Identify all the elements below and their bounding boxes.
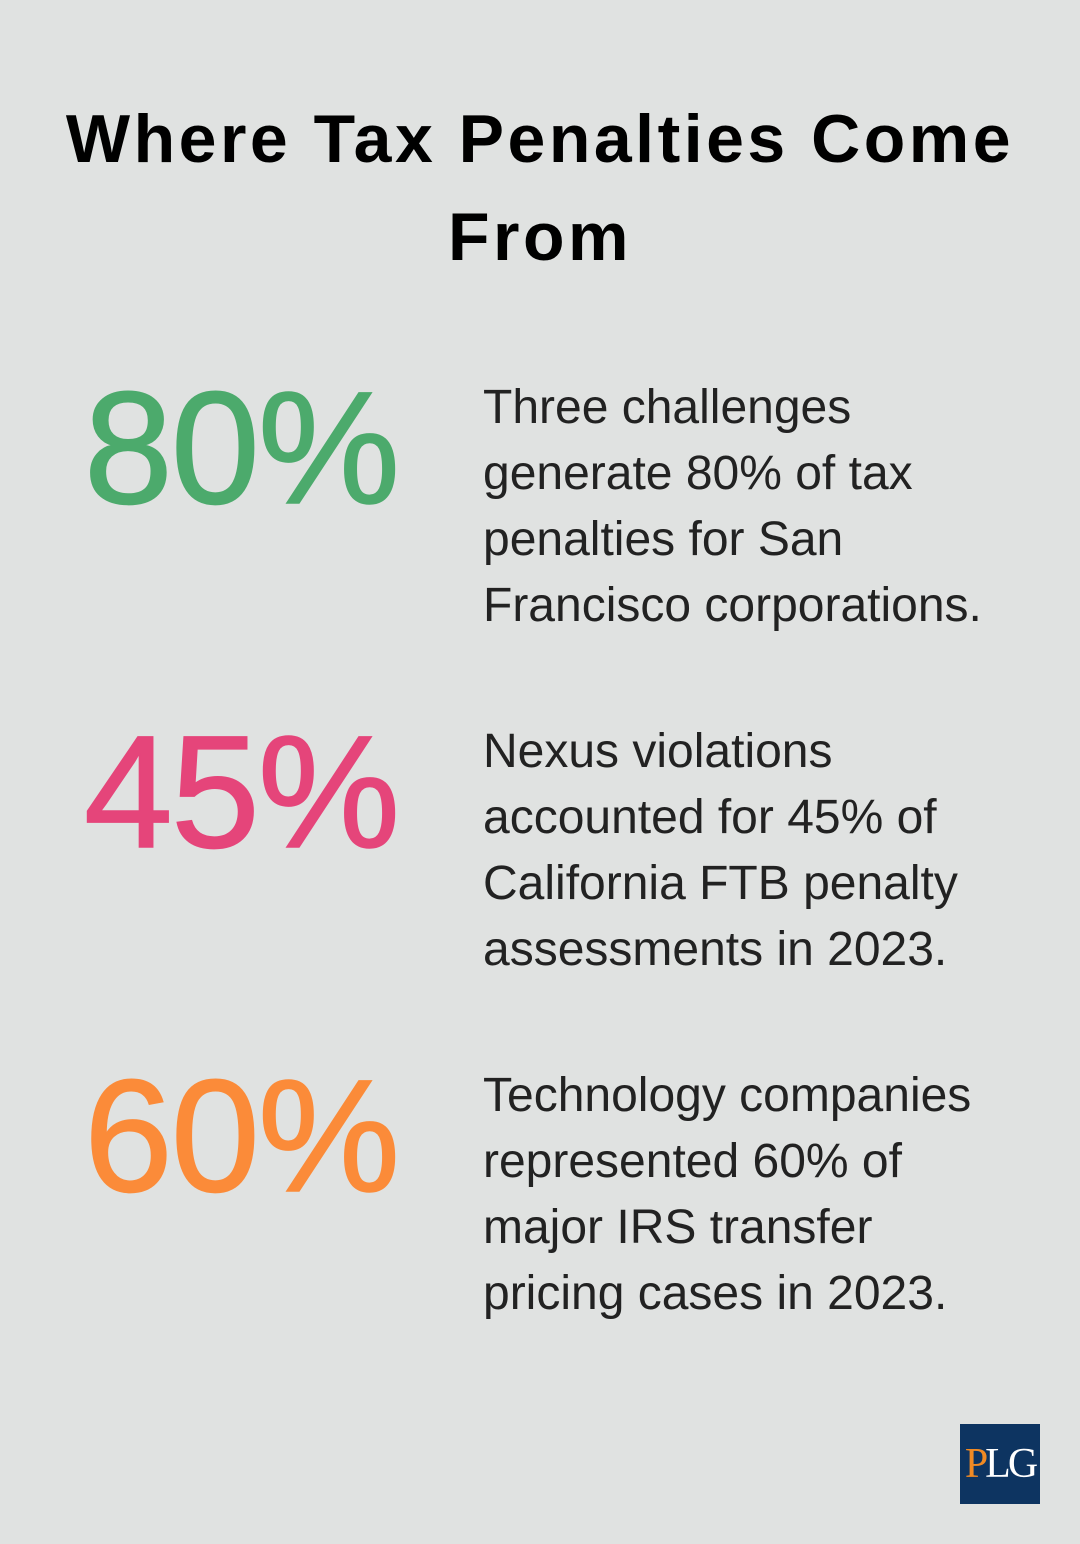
stat: 60%: 60% <box>84 1046 398 1225</box>
text: 45% description: assessments in 2023. <box>483 923 947 976</box>
title: Where Tax Penalties Come <box>66 101 1014 177</box>
text: 80% description: Three challenges <box>483 381 851 434</box>
text: 60% description: major IRS transfer <box>483 1201 872 1254</box>
text: 80% description: Francisco corporations. <box>483 579 982 632</box>
stat: 80%: 80% <box>84 358 398 537</box>
text: 80% description: generate 80% of tax <box>483 447 913 500</box>
text: 45% description <box>483 725 958 976</box>
title <box>66 101 1014 275</box>
text: 45% description: Nexus violations <box>483 725 832 778</box>
text: 60% description: represented 60% of <box>483 1135 902 1188</box>
text: 45% description: accounted for 45% of <box>483 791 937 844</box>
logo: PLG <box>960 1424 1040 1504</box>
text: 60% description: Technology companies <box>483 1069 971 1122</box>
title: From <box>448 199 632 275</box>
logo: PLG: PLG <box>965 1441 1035 1487</box>
text: 60% description <box>483 1069 971 1320</box>
text: 60% description: pricing cases in 2023. <box>483 1267 947 1320</box>
text: 80% description <box>483 381 982 632</box>
text: 45% description: California FTB penalty <box>483 857 958 910</box>
text: 80% description: penalties for San <box>483 513 843 566</box>
stat: 45%: 45% <box>84 702 398 881</box>
